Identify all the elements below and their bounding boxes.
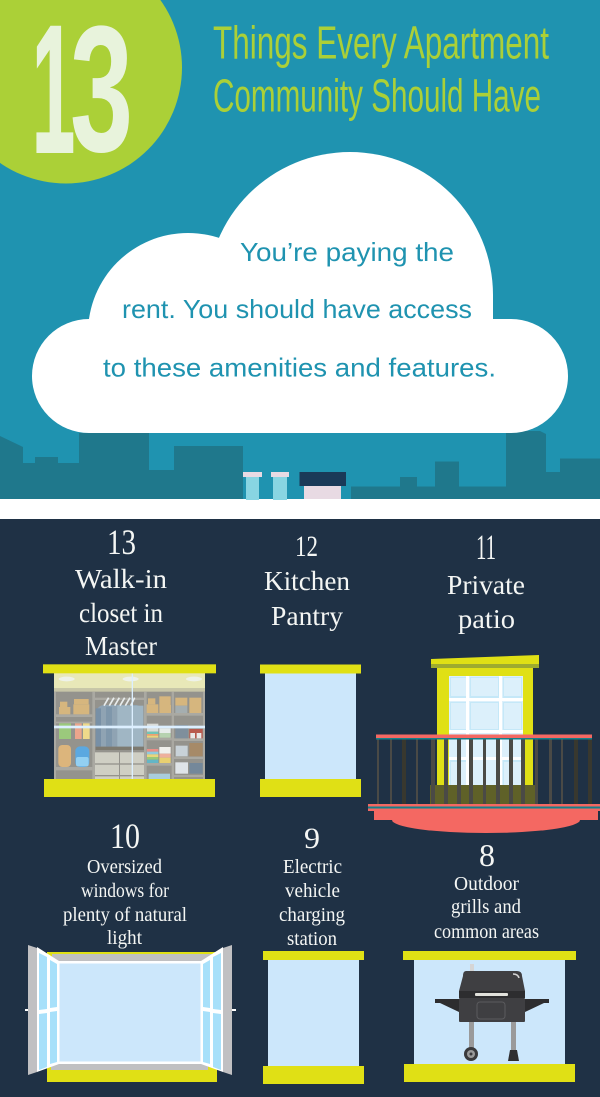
icon: green circle with number 13 [0, 0, 182, 191]
illustration: EV charging station [263, 951, 364, 1084]
text: item 10 oversized windows: light [107, 927, 142, 949]
text: item 9 EV charging: vehicle [285, 880, 340, 902]
text: item 8 outdoor grills [434, 837, 539, 943]
cloud callout: rent. You should have access [122, 294, 472, 324]
right shutter [201, 945, 232, 1075]
text: item 12 kitchen pantry: Kitchen [264, 566, 350, 596]
title [213, 17, 549, 122]
illustration: grill [403, 951, 576, 1082]
text: item 11 private patio: patio [458, 604, 515, 634]
cloud callout [32, 152, 568, 433]
text: item 8 outdoor grills: Outdoor [454, 873, 519, 895]
text: item 11 private patio: 11 [476, 527, 496, 567]
text: item 10 oversized windows: Oversized [87, 856, 162, 878]
text: item 8 outdoor grills: 8 [479, 837, 495, 873]
text: item 11 private patio: Private [447, 570, 525, 600]
text: item 9 EV charging: station [287, 928, 337, 950]
text: item 8 outdoor grills: grills and [451, 896, 521, 918]
hanging clothes and bags [59, 723, 71, 739]
text: item 11 private patio [447, 527, 525, 634]
text: item 9 EV charging: 9 [304, 822, 320, 855]
panel: dark content background [0, 519, 600, 1097]
text: item 13 walk-in closet: closet in [79, 598, 163, 628]
boxes [59, 696, 201, 714]
text: item 9 EV charging: charging [279, 904, 345, 926]
illustration: balcony patio [368, 655, 600, 833]
text: item 9 EV charging [279, 822, 345, 950]
drawers [95, 752, 144, 779]
text: item 12 kitchen pantry: Pantry [271, 601, 344, 631]
cloud callout: You’re paying the [240, 237, 454, 267]
left shutter [28, 945, 59, 1075]
text: item 13 walk-in closet: 13 [107, 522, 136, 562]
folded clothes stacks [147, 724, 171, 779]
text: item 9 EV charging: Electric [283, 856, 342, 878]
cloud callout: to these amenities and features. [103, 352, 496, 382]
illustration: open window [25, 945, 236, 1082]
illustration: pantry [260, 664, 361, 797]
skyline [0, 431, 600, 500]
hanging coats [96, 698, 144, 750]
text: item 12 kitchen pantry [264, 530, 350, 631]
grill legs and wheels [464, 1022, 519, 1061]
illustration: walk-in closet [43, 664, 216, 797]
panel: header background [0, 0, 600, 499]
text: item 8 outdoor grills: common areas [434, 921, 539, 943]
text: item 13 walk-in closet: Walk-in [75, 564, 168, 594]
text: item 10 oversized windows: 10 [110, 816, 140, 856]
text: item 13 walk-in closet: Master [85, 631, 157, 661]
text: item 10 oversized windows: windows for [81, 880, 169, 902]
glass lines [132, 670, 133, 779]
text: item 10 oversized windows [63, 816, 187, 949]
railing balusters [377, 739, 592, 805]
text: item 13 walk-in closet [75, 522, 168, 661]
text: item 10 oversized windows: plenty of natural [63, 904, 187, 926]
text: item 12 kitchen pantry: 12 [295, 530, 318, 563]
shoes [175, 725, 203, 774]
